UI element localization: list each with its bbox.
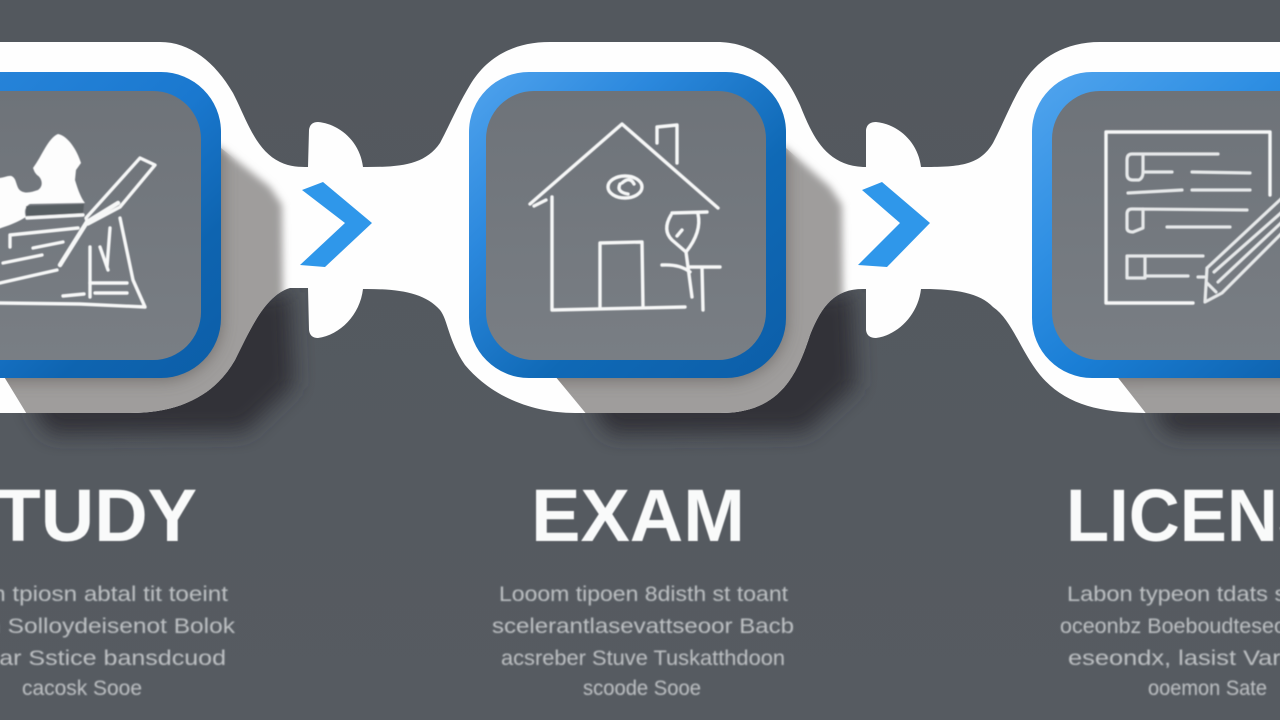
- tile 2 blue frame: [469, 72, 786, 378]
- white connector band: [0, 42, 1280, 413]
- text block: exam description: acsreber Stuve Tuskatthdoon: [501, 647, 785, 670]
- text block: license description: ooemon Sate: [1148, 677, 1267, 700]
- tile 1 face: [0, 91, 201, 360]
- text block: exam description: [492, 583, 794, 700]
- step 3 tile: license: [1032, 72, 1280, 378]
- long shadows cast on white band: [5, 122, 1280, 413]
- icon: document and pencil: [1106, 132, 1280, 303]
- heading: exam: EXAM: [531, 474, 745, 557]
- tile 3 blue frame: [1032, 72, 1280, 378]
- arrow: chevron exam to license: [858, 182, 930, 267]
- text block: license description: [1060, 583, 1280, 700]
- icon: landscape and pen: [0, 134, 155, 307]
- tile 3 face: [1052, 91, 1280, 360]
- text block: exam description: Looom tipoen 8disth st toant: [499, 583, 788, 606]
- step 1 tile: study: [0, 72, 221, 378]
- text block: study description: [0, 583, 236, 700]
- text block: study description: cacosk Sooe: [22, 677, 142, 700]
- text block: exam description: scelerantlasevattseoor Bacb: [492, 615, 794, 638]
- text block: exam description: scoode Sooe: [583, 677, 701, 700]
- tile 2 face: [486, 91, 766, 360]
- step 2 tile: exam: [469, 72, 786, 378]
- icon: house: [530, 124, 720, 310]
- arrow: chevron study to exam: [300, 182, 372, 267]
- tile 1 blue frame: [0, 72, 221, 378]
- drop shadows on background: [30, 292, 1280, 434]
